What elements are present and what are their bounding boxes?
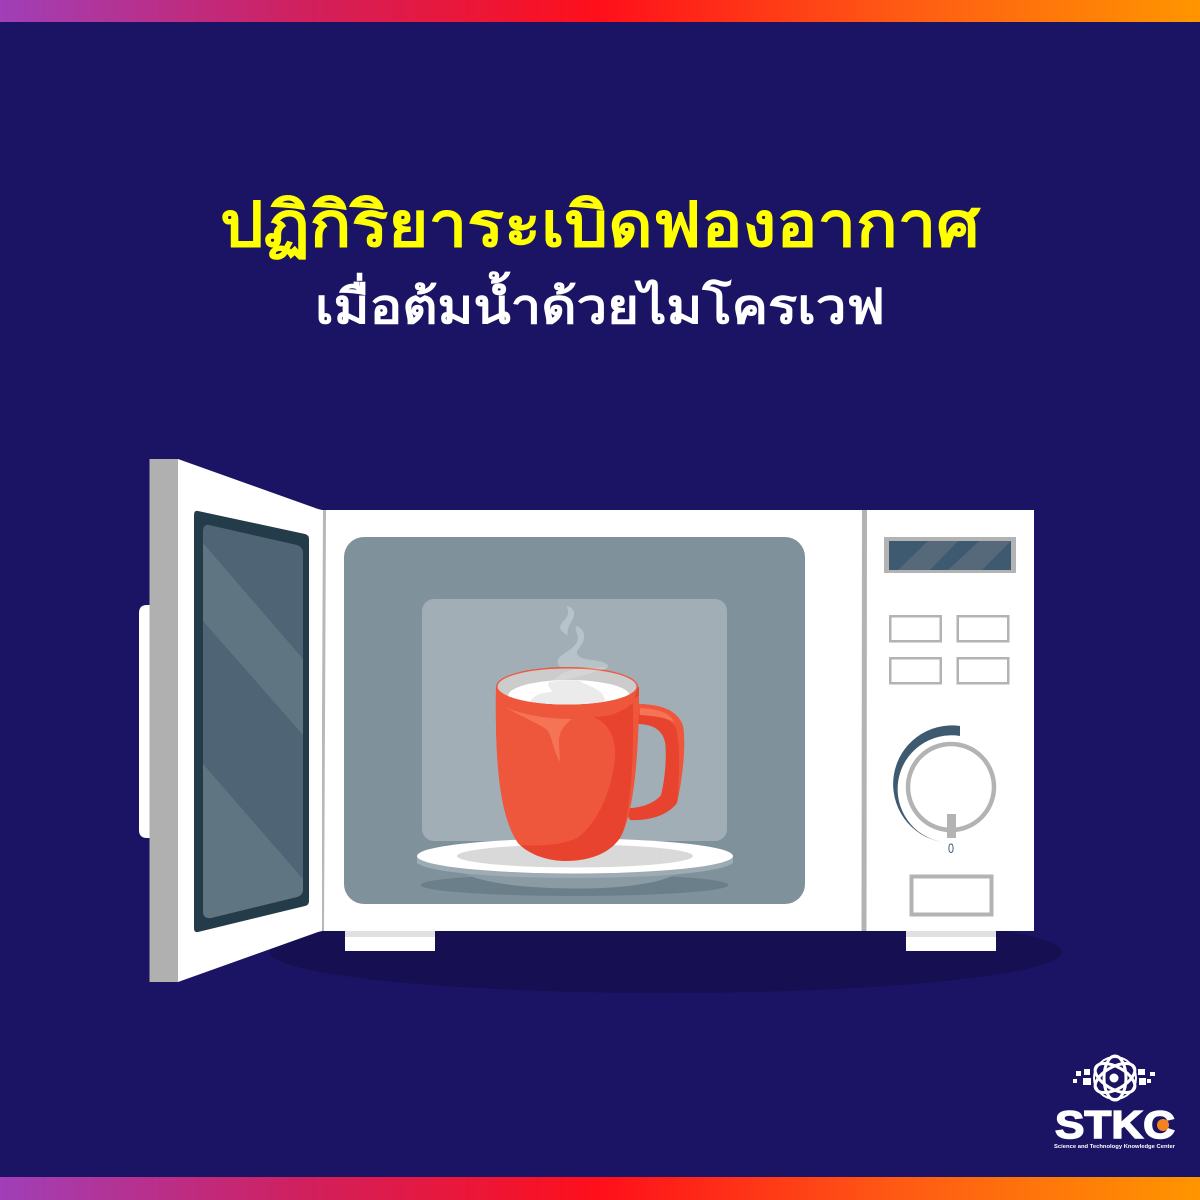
mug highlight <box>505 707 572 762</box>
dial pointer <box>947 814 956 838</box>
title line 2: เมื่อต้มน้ำด้วยไมโครเวฟ <box>315 271 885 334</box>
logo atom icon <box>1090 1056 1140 1100</box>
dial arc <box>893 725 960 842</box>
microwave body <box>322 510 1034 931</box>
title line 1: ปฏิกิริยาระเบิดฟองอากาศ <box>220 191 982 260</box>
panel divider <box>862 510 867 931</box>
plate shadow <box>420 874 728 896</box>
title <box>220 191 982 334</box>
door handle <box>139 605 150 838</box>
plate rim <box>417 856 733 878</box>
logo pixel squares <box>1073 1069 1155 1085</box>
dial <box>908 744 994 830</box>
drink surface <box>508 680 630 704</box>
plate top <box>417 838 733 874</box>
microwave feet <box>345 931 996 951</box>
plate <box>417 838 733 896</box>
door edge <box>150 459 178 982</box>
logo orange dot <box>1157 1119 1169 1131</box>
logo tagline: Science and Technology Knowledge Center <box>1054 1144 1176 1150</box>
door window frame <box>194 511 309 932</box>
logo wordmark: STKC <box>1055 1104 1175 1147</box>
door release button <box>912 876 992 914</box>
plate foot <box>457 870 683 888</box>
preset buttons <box>890 616 1008 683</box>
control panel <box>884 537 1016 914</box>
display <box>884 537 1016 573</box>
mug body <box>496 687 639 861</box>
mug inside <box>498 668 636 704</box>
plate well <box>457 844 693 868</box>
open door <box>139 459 322 982</box>
steam <box>558 606 608 672</box>
door panel <box>178 459 322 982</box>
dial zero label: 0 <box>948 840 954 856</box>
mug <box>490 667 684 861</box>
top gradient bar <box>0 0 1200 22</box>
mug light side <box>496 688 639 846</box>
cooking cavity <box>344 537 805 904</box>
cavity back wall <box>422 599 727 841</box>
door hinge line <box>321 510 326 931</box>
mug rim <box>496 667 638 706</box>
door window glass <box>200 520 306 925</box>
steam over rim <box>550 667 608 683</box>
microwave floor shadow <box>270 911 1062 993</box>
bottom gradient bar <box>0 1177 1200 1200</box>
microwave <box>321 510 1034 951</box>
logo <box>1054 1056 1176 1150</box>
mug handle <box>624 704 684 820</box>
